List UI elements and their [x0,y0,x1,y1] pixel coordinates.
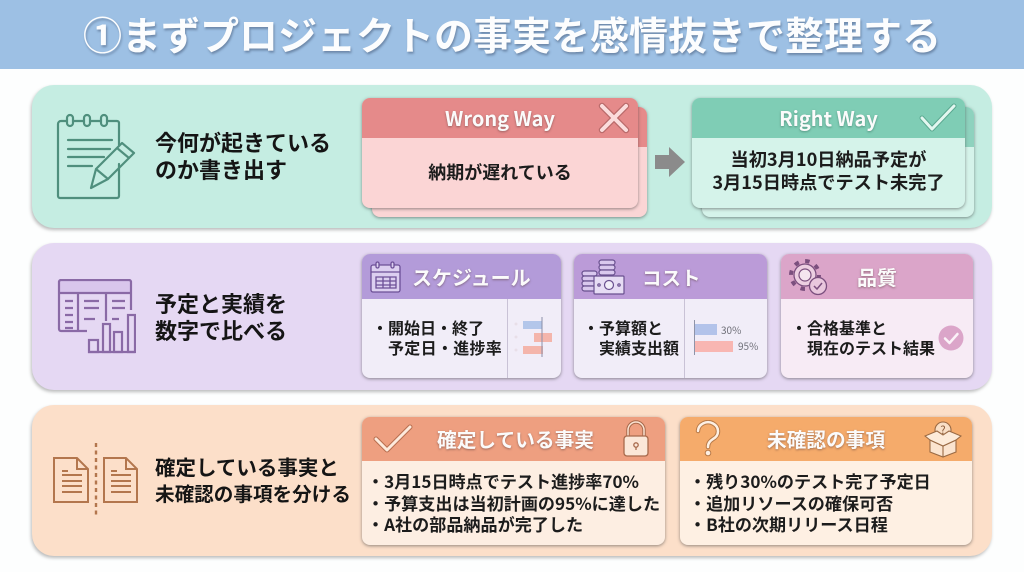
icon: padlock [623,420,649,457]
confirmed heading: 確定している事実 [437,424,594,453]
mini bar chart [694,320,758,355]
icon: coins and banknote [581,259,625,295]
quality header [781,254,973,299]
mini bar chart: 30% [721,322,741,337]
label: compare plan and actual: 予定と実績を [155,287,287,319]
confirmed facts list: ・予算支出は当初計画の95%に達した [367,490,660,514]
quality text: ・合格基準と [791,315,887,339]
panel: separate facts and unknowns [32,405,992,556]
right way heading: Right Way [779,103,878,132]
unconfirmed list: ・追加リソースの確保可否 [689,490,893,514]
label: write down what is happening: のか書き出す [155,153,287,185]
arrow: wrong to right [655,147,685,177]
icon: check [920,104,956,132]
icon: two documents with divider [53,443,138,514]
icon: table and bar chart [58,279,136,354]
card: right way [692,98,965,208]
confirmed facts list: ・A社の部品納品が完了した [367,511,583,536]
title: ①まずプロジェクトの事実を感情抜きで整理する [83,6,941,62]
card: unconfirmed items [680,417,972,545]
card: cost [574,254,767,378]
wrong way text: 納期が遅れている [428,159,572,185]
icon: box with question: ? [940,422,946,438]
schedule header [362,254,561,299]
right way text: 当初3月10日納品予定が [731,146,926,172]
right way text [712,146,945,195]
icon: calendar [370,261,401,293]
cost divider [684,299,685,378]
mini bar chart: 95% [738,338,758,353]
panel: write down what is happening [32,85,992,228]
card: schedule [362,254,561,378]
schedule divider [507,299,508,378]
wrong way back sheet [372,107,647,217]
label: separate facts and unknowns [155,451,351,507]
confirmed facts list [367,468,660,536]
unconfirmed list [689,468,931,536]
icon: check badge [938,326,964,350]
right way header [692,98,965,138]
icon: gear with check [789,259,828,296]
icon: cross [598,102,630,134]
unconfirmed header [680,417,972,461]
confirmed header [362,417,665,461]
cost text: 実績支出額 [599,335,679,359]
cost text [583,315,679,359]
header band [0,0,1024,69]
schedule heading: スケジュール [412,262,531,291]
label: write down what is happening [155,126,331,185]
schedule text: ・開始日・終了 [372,315,484,339]
schedule text: 予定日・進捗率 [388,335,502,359]
right way text: 3月15日時点でテスト未完了 [712,169,945,195]
icon: check mark [374,424,412,452]
label: separate facts and unknowns: 確定している事実と [155,451,339,481]
unconfirmed heading: 未確認の事項 [767,424,885,453]
unconfirmed list: ・残り30%のテスト完了予定日 [689,468,931,493]
quality text [791,315,935,359]
label: separate facts and unknowns: 未確認の事項を分ける [155,478,351,507]
icon: box with question [924,422,962,458]
unconfirmed list: ・B社の次期リリース日程 [689,511,888,536]
panel: compare plan and actual [32,243,992,390]
label: write down what is happening: 今何が起きている [155,126,331,158]
mini gantt chart [514,317,552,357]
icon: question mark [696,420,720,456]
confirmed facts list: ・3月15日時点でテスト進捗率70% [367,468,639,493]
label: compare plan and actual: 数字で比べる [155,314,287,346]
card: wrong way [362,98,638,208]
wrong way heading: Wrong Way [445,103,555,132]
cost header [574,254,767,299]
card: quality [781,254,973,378]
schedule text [372,315,502,359]
cost text: ・予算額と [583,315,663,339]
right way back sheet [702,107,974,217]
quality heading: 品質 [857,262,897,291]
icon: notepad and pencil [56,114,136,200]
label: compare plan and actual [155,287,287,346]
card: confirmed facts [362,417,665,545]
cost heading: コスト [642,262,701,291]
wrong way header [362,98,638,138]
quality text: 現在のテスト結果 [807,335,935,359]
